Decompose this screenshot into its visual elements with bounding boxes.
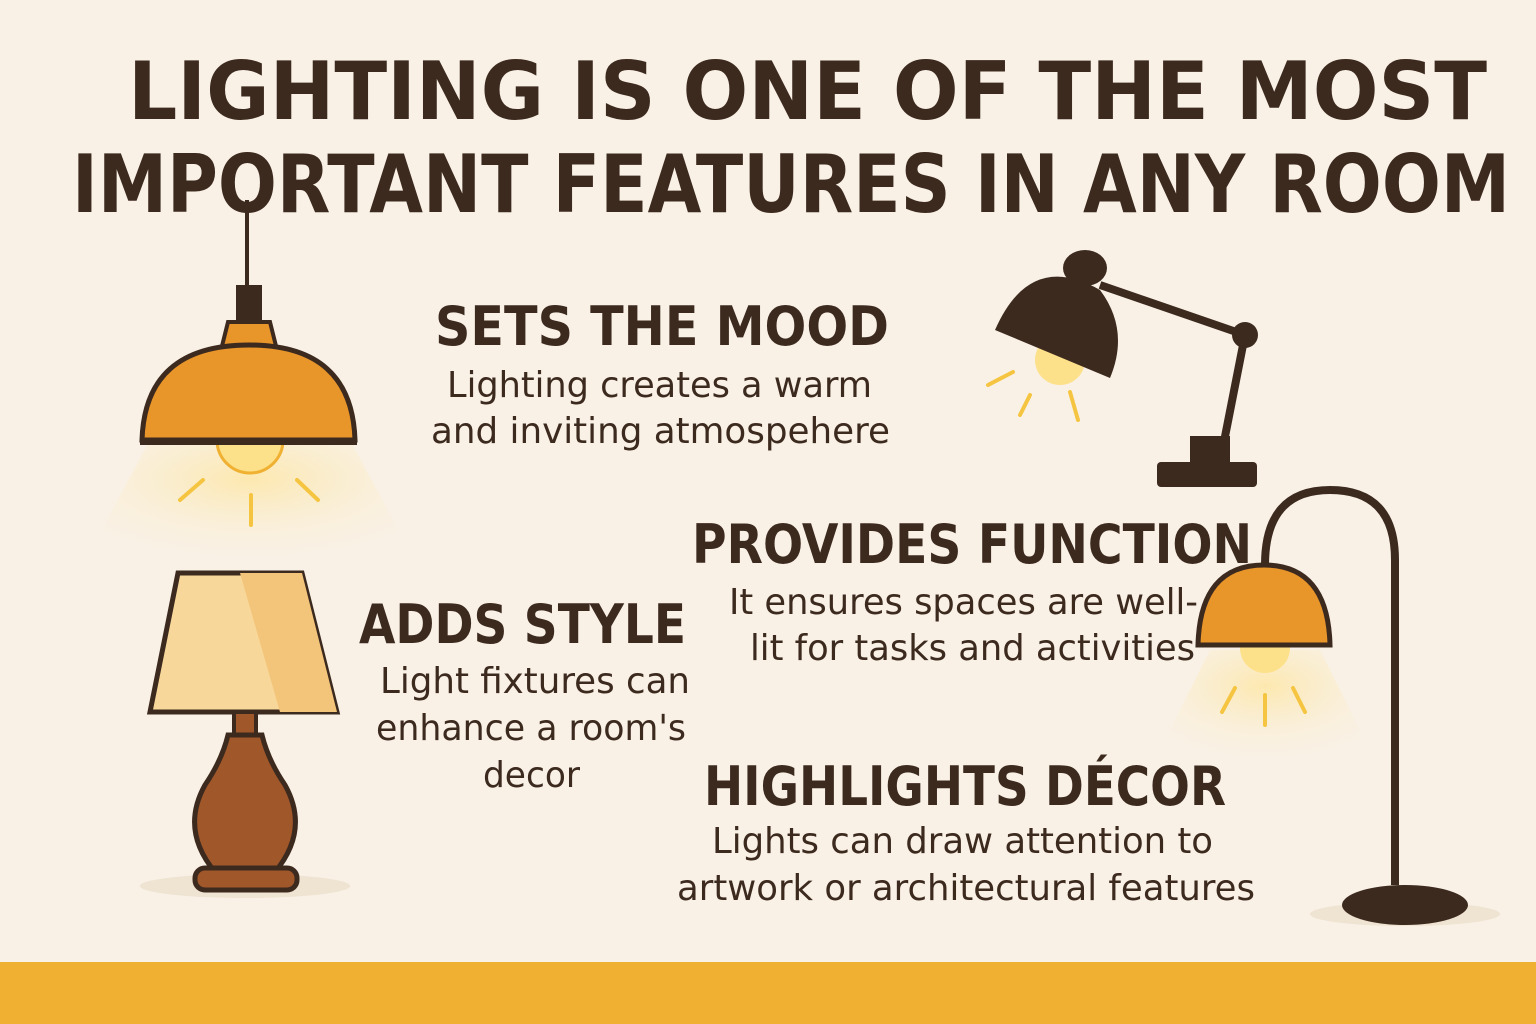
text block: adds style: Light fixtures can xyxy=(380,661,690,702)
text block: provides function xyxy=(692,513,1252,669)
text block: adds style: ADDS STYLE xyxy=(359,593,686,656)
title: LIGHTING IS ONE OF THE MOST xyxy=(128,45,1487,138)
text block: highlights decor: HIGHLIGHTS DÉCOR xyxy=(704,755,1226,818)
text block: adds style: enhance a room's xyxy=(376,708,686,749)
icon: floor lamp xyxy=(1150,490,1500,926)
text block: provides function: PROVIDES FUNCTION xyxy=(692,513,1252,576)
text block: adds style: decor xyxy=(483,755,580,796)
title xyxy=(72,45,1510,231)
text block: adds style xyxy=(359,593,690,796)
text block: provides function: It ensures spaces are well- xyxy=(729,582,1198,623)
icon: table lamp xyxy=(140,573,350,898)
text block: sets the mood: Lighting creates a warm xyxy=(447,365,872,406)
bottom bar xyxy=(0,962,1536,1024)
text block: provides function: lit for tasks and activities xyxy=(750,628,1195,669)
text block: sets the mood: and inviting atmospehere xyxy=(431,411,890,452)
text block: highlights decor: Lights can draw attention to xyxy=(712,821,1213,862)
icon: desk lamp xyxy=(988,250,1258,487)
text block: highlights decor: artwork or architectural features xyxy=(677,868,1255,909)
icon: pendant lamp xyxy=(80,200,420,570)
text block: sets the mood: SETS THE MOOD xyxy=(435,295,889,358)
text block: highlights decor xyxy=(677,755,1255,909)
text block: sets the mood xyxy=(431,295,890,452)
